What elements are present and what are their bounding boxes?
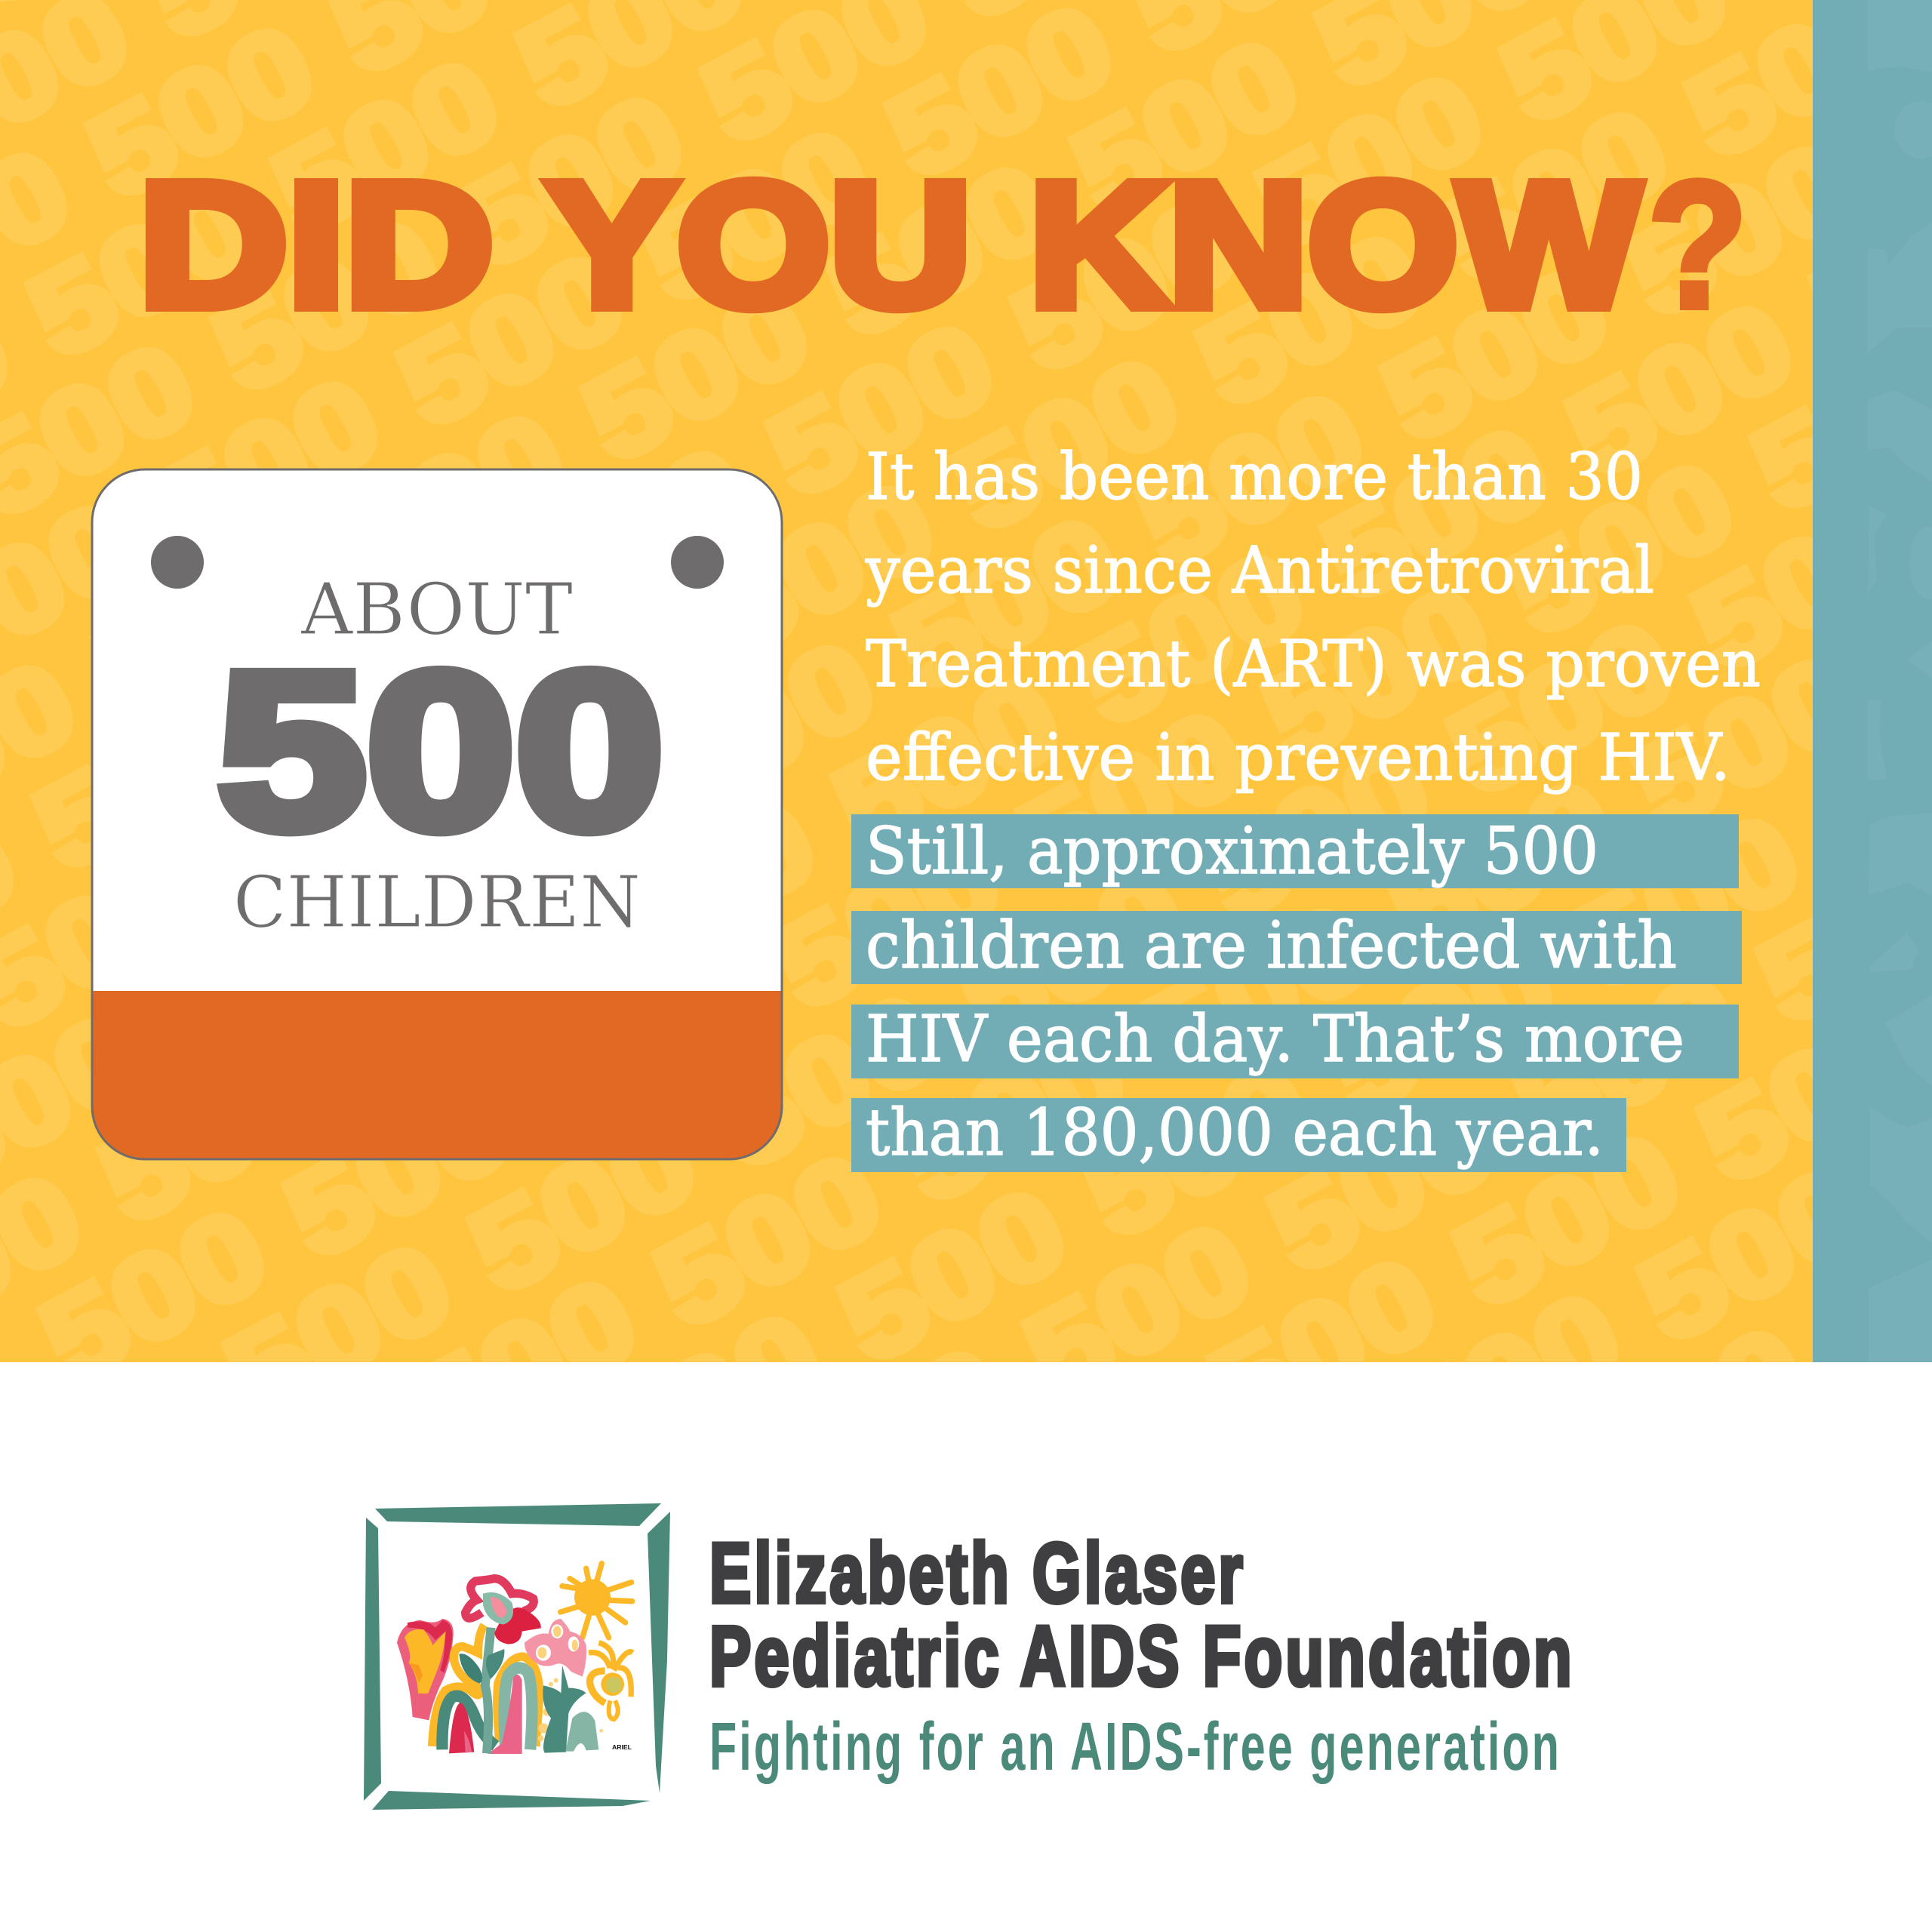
background pattern: repeated 500: 500 bbox=[872, 490, 1140, 717]
background pattern: repeated 500: 500 bbox=[807, 137, 1075, 364]
background pattern: repeated 500: 500 bbox=[1236, 47, 1504, 274]
background pattern: repeated 500: 500 bbox=[1672, 469, 1932, 697]
background pattern: repeated 500: 500 bbox=[389, 1251, 657, 1478]
background pattern: repeated 500: 500 bbox=[628, 614, 896, 841]
card number: 500: 500 bbox=[217, 626, 664, 875]
highlight line 2: children are infected with bbox=[866, 909, 1677, 983]
background pattern: repeated 500: 500 bbox=[73, 510, 341, 737]
background pattern: repeated 500: 500 bbox=[198, 704, 466, 931]
background pattern: repeated 500: 500 bbox=[813, 649, 1081, 876]
background pattern: repeated 500: 500 bbox=[759, 1321, 1027, 1548]
side band: teal bbox=[1813, 0, 1932, 1362]
title: YOU bbox=[546, 146, 971, 343]
background pattern: repeated 500: 500 bbox=[568, 774, 836, 1001]
title bbox=[139, 143, 1748, 346]
background pattern: repeated 500: 500 bbox=[139, 863, 407, 1091]
card outline bbox=[92, 469, 782, 1159]
background pattern: repeated 500: 500 bbox=[1552, 788, 1820, 1015]
background pattern: repeated 500: 500 bbox=[819, 1161, 1087, 1389]
background pattern: repeated 500: 500 bbox=[377, 226, 645, 454]
body line 3: Treatment (ART) was proven bbox=[866, 627, 1761, 702]
background pattern: repeated 500: 500 bbox=[1242, 559, 1510, 786]
background pattern: repeated 500: 500 bbox=[8, 157, 275, 384]
background pattern: repeated 500: 500 bbox=[509, 933, 777, 1160]
card text: about: ABOUT bbox=[300, 568, 573, 651]
card orange footer bbox=[91, 991, 783, 1160]
background pattern: repeated 500: 500 bbox=[878, 1002, 1146, 1229]
background pattern: repeated 500: 500 bbox=[264, 1057, 532, 1284]
organisation name line 2: Pediatric AIDS Foundation bbox=[709, 1609, 1572, 1703]
background pattern: repeated 500: 500 bbox=[437, 67, 705, 294]
highlight line 1: Still, approximately 500 bbox=[866, 814, 1598, 889]
highlight line 3: HIV each day. That’s more bbox=[866, 1002, 1684, 1077]
background pattern: repeated 500: 500 bbox=[1004, 1196, 1272, 1423]
background pattern: repeated 500: 500 bbox=[1177, 206, 1444, 433]
background pattern: repeated 500: 500 bbox=[1117, 365, 1385, 592]
background pattern: repeated 500: 500 bbox=[634, 1127, 902, 1354]
card body bbox=[92, 469, 782, 1159]
logo painting bbox=[397, 1564, 632, 1754]
background pattern: repeated 500: 500 bbox=[1123, 878, 1391, 1105]
highlight bar 4 bbox=[851, 1098, 1626, 1172]
background pattern: repeated 500: 500 bbox=[1248, 1072, 1516, 1299]
highlighted text block bbox=[851, 814, 1742, 1172]
body line 4: effective in preventing HIV. bbox=[866, 721, 1730, 795]
background pattern: repeated 500: 500 bbox=[79, 1023, 347, 1250]
background pattern: repeated 500: 500 bbox=[1421, 82, 1689, 309]
logo frame bbox=[364, 1503, 670, 1810]
highlight line 4: than 180,000 each year. bbox=[866, 1096, 1604, 1171]
background pattern: repeated 500: 500 bbox=[1493, 947, 1761, 1174]
background pattern: repeated 500: 500 bbox=[383, 739, 651, 966]
background pattern: repeated 500: 500 bbox=[1367, 753, 1635, 980]
background pattern: repeated 500: 500 bbox=[133, 351, 401, 578]
background pattern: repeated 500: 500 bbox=[753, 808, 1021, 1035]
background pattern: repeated 500: 500 bbox=[1051, 12, 1319, 239]
background pattern: repeated 500: 500 bbox=[1302, 400, 1570, 627]
background pattern: repeated 500: 500 bbox=[1361, 241, 1629, 468]
background pattern: repeated 500: 500 bbox=[1427, 594, 1695, 821]
background pattern: repeated 500: 500 bbox=[449, 1092, 717, 1319]
background pattern: repeated 500: 500 bbox=[1546, 275, 1814, 503]
body text block bbox=[865, 440, 1761, 795]
logo painting: ARIEL bbox=[612, 1743, 632, 1751]
background pattern: repeated 500: 500 bbox=[622, 102, 890, 329]
card hole left bbox=[151, 536, 204, 589]
background pattern: repeated 500: 500 bbox=[1487, 435, 1755, 662]
highlight bar 3 bbox=[851, 1004, 1739, 1078]
logo: framed children's painting bbox=[364, 1503, 670, 1810]
highlight bar 2 bbox=[851, 911, 1742, 984]
background pattern: repeated 500: 500 bbox=[1183, 718, 1451, 946]
background pattern: repeated 500: 500 bbox=[1374, 1266, 1641, 1493]
title: ? bbox=[1647, 143, 1748, 346]
background pattern: repeated 500: 500 bbox=[443, 580, 711, 807]
background pattern: repeated 500: 500 bbox=[574, 1286, 842, 1513]
background pattern: repeated 500: 500 bbox=[998, 684, 1266, 911]
background pattern: repeated 500: 500 bbox=[688, 455, 955, 682]
body line 2: years since Antiretroviral bbox=[865, 534, 1654, 608]
card hole right bbox=[671, 536, 724, 589]
background pattern: repeated 500: 500 bbox=[747, 296, 1015, 523]
background pattern: repeated 500: 500 bbox=[1189, 1231, 1457, 1458]
background pattern: repeated 500: 500 bbox=[1057, 525, 1325, 752]
background pattern: repeated 500: 500 bbox=[20, 1182, 288, 1409]
background pattern: repeated 500: 500 bbox=[1612, 629, 1880, 856]
background pattern: repeated 500: 500 bbox=[1618, 1141, 1886, 1368]
card text: children: CHILDREN bbox=[233, 861, 641, 944]
panel: yellow background bbox=[0, 0, 1814, 1362]
background pattern: repeated 500: 500 bbox=[192, 192, 460, 419]
background pattern: repeated 500: 500 bbox=[1433, 1106, 1701, 1334]
background pattern: repeated 500: 500 bbox=[1606, 116, 1874, 343]
background pattern: repeated 500: 500 bbox=[938, 843, 1206, 1070]
title: KNOW bbox=[1029, 146, 1640, 343]
background pattern: repeated 500: 500 bbox=[992, 171, 1260, 398]
organisation name line 1: Elizabeth Glaser bbox=[709, 1526, 1243, 1620]
highlight bar 1 bbox=[851, 814, 1739, 888]
background pattern: repeated 500: 500 bbox=[258, 545, 526, 772]
background pattern: repeated 500: 500 bbox=[503, 420, 771, 648]
background pattern: repeated 500: 500 bbox=[694, 968, 961, 1195]
background pattern: repeated 500: 500 bbox=[1308, 912, 1576, 1140]
background pattern: repeated 500: 500 bbox=[562, 261, 830, 488]
background pattern: repeated 500: 500 bbox=[252, 32, 520, 260]
background pattern: repeated 500: 500 bbox=[205, 1217, 472, 1444]
background pattern: repeated 500: 500 bbox=[14, 669, 281, 897]
background pattern: repeated 500: 500 bbox=[1558, 1300, 1826, 1527]
background pattern: repeated 500: 500 bbox=[67, 0, 335, 225]
background pattern: repeated 500: 500 bbox=[324, 898, 592, 1125]
background pattern: repeated 500: 500 bbox=[318, 386, 586, 613]
background pattern: repeated 500: 500 bbox=[932, 331, 1200, 558]
background pattern: repeated 500: 500 bbox=[1063, 1037, 1331, 1264]
tagline: Fighting for an AIDS-free generation bbox=[709, 1709, 1559, 1785]
title: DID bbox=[139, 146, 494, 343]
calendar card bbox=[91, 469, 783, 1160]
body line 1: It has been more than 30 bbox=[866, 440, 1643, 515]
